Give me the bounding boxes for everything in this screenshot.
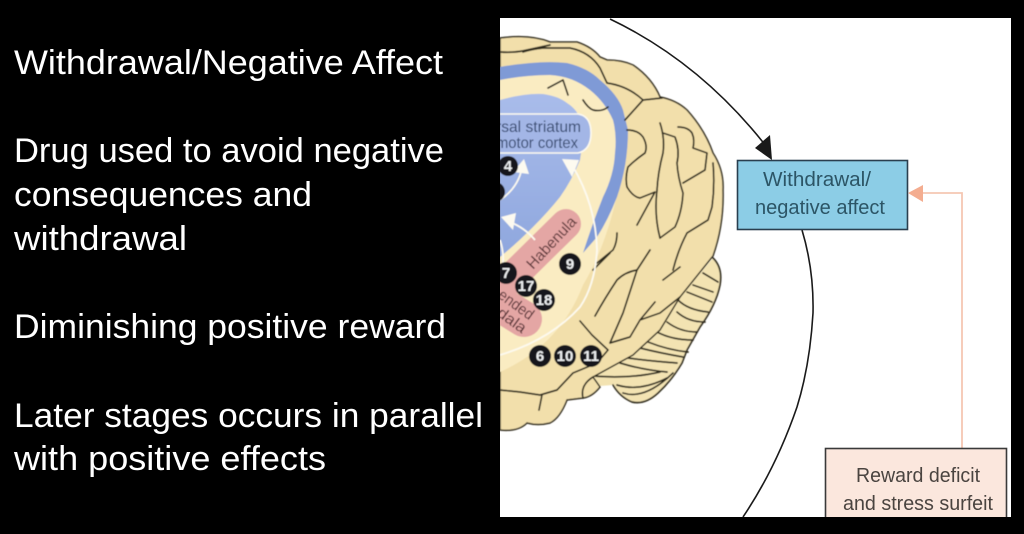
number 9: 9 [566, 256, 574, 273]
habenula pill: Habenula [523, 213, 581, 273]
bullet: drug used to avoid negative consequences: consequences and [14, 176, 312, 214]
bullet: diminishing positive reward: Diminishing positive reward [14, 308, 446, 346]
box: withdrawal / negative affect: negative affect [755, 197, 885, 219]
numbered circles [500, 155, 603, 368]
arrow: black cycle arc into withdrawal box [610, 19, 772, 160]
number 6: 6 [536, 348, 544, 365]
inner lighter area [500, 68, 624, 372]
habenula pill [505, 213, 581, 284]
number 4: 4 [504, 158, 513, 175]
bullet: later stages in parallel: Later stages occurs in parallel [14, 397, 483, 435]
arrow: reward deficit to withdrawal [908, 185, 962, 448]
heading: Withdrawal/Negative Affect: Withdrawal/Negative Affect [14, 44, 444, 82]
number 7: 7 [502, 265, 510, 282]
extended amygdala pill: dala [494, 304, 530, 337]
number 17 [515, 275, 537, 297]
number 4 [498, 156, 518, 176]
box: reward deficit and stress surfeit: and stress surfeit [843, 493, 993, 515]
cerebellum [593, 258, 721, 403]
dorsal striatum label pill: rsal striatum [496, 119, 581, 136]
box: withdrawal / negative affect: Withdrawal/ [763, 169, 871, 191]
bullet: drug used to avoid negative consequences: Drug used to avoid negative [14, 132, 444, 170]
bullet: drug used to avoid negative consequences [13, 132, 444, 258]
number 18 [533, 289, 555, 311]
bullet: later stages in parallel: with positive effects [13, 440, 326, 478]
number 10 [554, 345, 576, 367]
box: reward deficit and stress surfeit [824, 448, 1008, 517]
brain illustration [485, 37, 723, 430]
cerebrum outline and fill [500, 37, 723, 430]
extended amygdala pill [500, 291, 542, 338]
number 11: 11 [583, 348, 599, 365]
bullet: drug used to avoid negative consequences: withdrawal [13, 220, 187, 258]
number 10: 10 [557, 348, 573, 365]
text block: slide text [13, 44, 483, 478]
arc: black cycle arc below withdrawal box [743, 230, 813, 517]
blue inner region [500, 94, 583, 257]
dorsal striatum label pill: motor cortex [496, 135, 578, 152]
box: reward deficit and stress surfeit: Reward deficit [856, 465, 980, 487]
extended amygdala pill: ended [495, 286, 537, 324]
number 6 [529, 345, 551, 367]
panel: diagram [485, 18, 1011, 528]
number 18: 18 [536, 292, 552, 309]
number 11 [580, 345, 602, 367]
number 7 [500, 261, 518, 284]
sulci [500, 45, 714, 410]
dorsal striatum label pill [496, 114, 591, 153]
box: withdrawal / negative affect [738, 160, 908, 230]
bullet: later stages in parallel [13, 397, 483, 478]
number 17: 17 [518, 278, 534, 295]
number 9 [559, 253, 581, 275]
blue band [500, 62, 628, 253]
white pathway arrows [500, 159, 597, 355]
